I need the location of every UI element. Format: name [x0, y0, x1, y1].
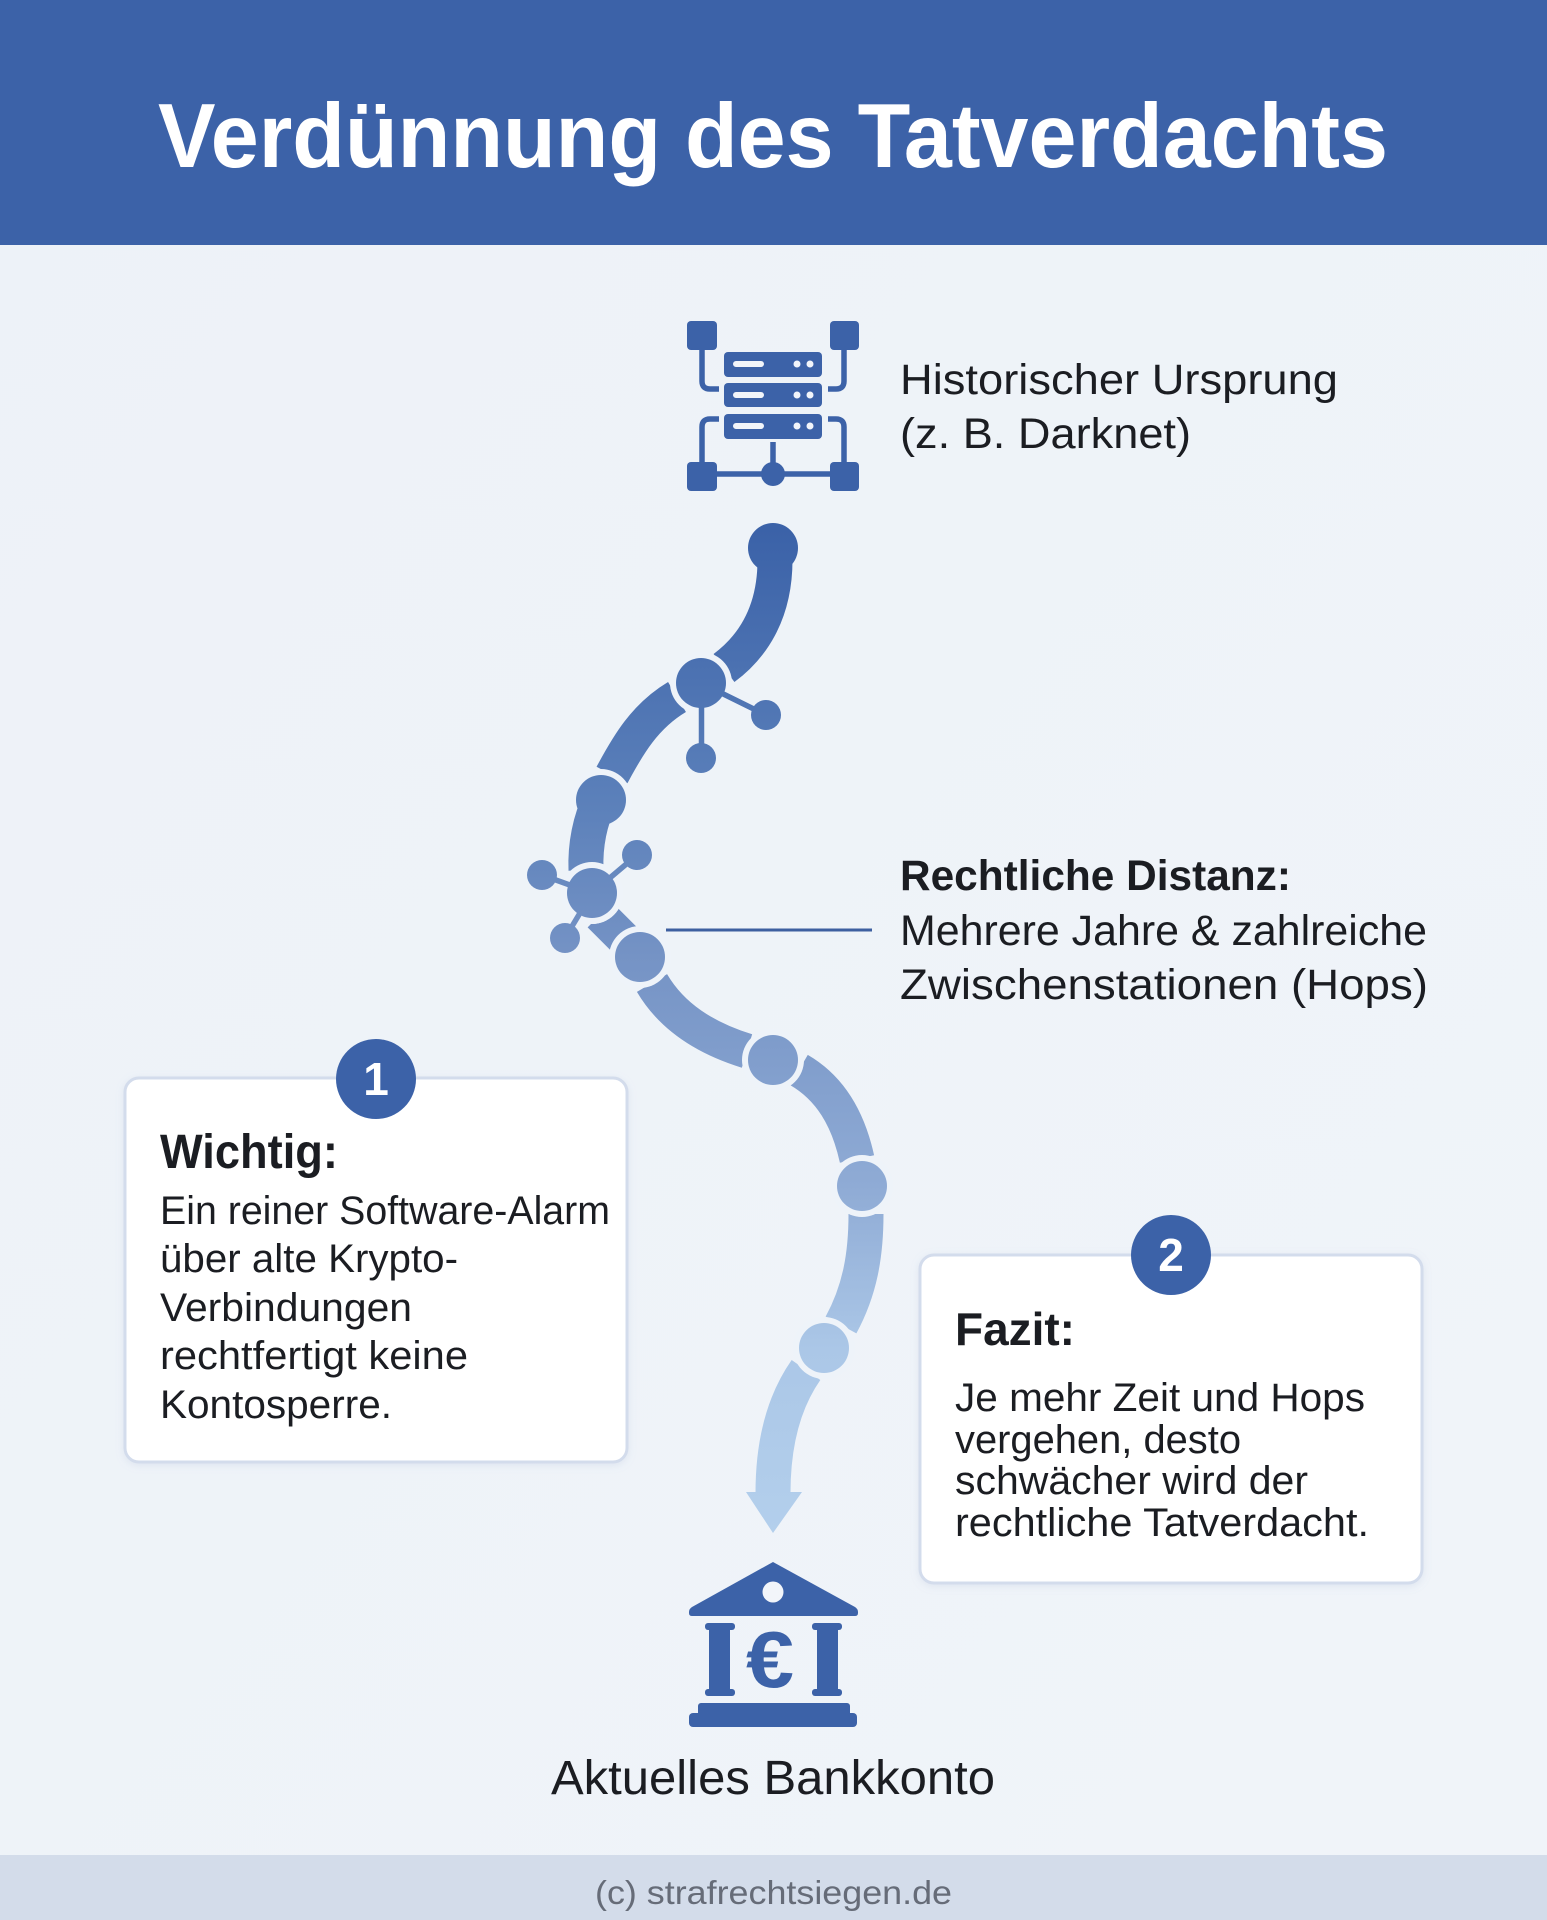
label: legal distance: Mehrere Jahre & zahlreiche: [900, 907, 1427, 955]
winding path with hop nodes: [527, 523, 893, 1533]
footer: (c) strafrechtsiegen.de: [595, 1874, 952, 1911]
label: historical origin: [900, 356, 1338, 458]
label: current bank account: Aktuelles Bankkonto: [551, 1752, 995, 1805]
body text: Fazit: schwächer wird der: [955, 1459, 1308, 1503]
icon: bank with euro: [689, 1562, 858, 1727]
label: legal distance: Zwischenstationen (Hops): [900, 961, 1428, 1009]
label: historical origin: Historischer Ursprung: [900, 356, 1338, 404]
body text: Wichtig: rechtfertigt keine: [160, 1334, 468, 1378]
label: legal distance: Rechtliche Distanz:: [900, 852, 1291, 900]
heading: Wichtig: Wichtig:: [160, 1126, 338, 1179]
icon: bank with euro: €: [746, 1615, 794, 1704]
body text: Wichtig: Verbindungen: [160, 1286, 412, 1330]
badge 2: [1131, 1215, 1211, 1295]
panel: Wichtig: [125, 1039, 627, 1462]
body text: Fazit: vergehen, desto: [955, 1418, 1241, 1462]
body text: Wichtig: Kontosperre.: [160, 1383, 392, 1427]
badge 1: 1: [363, 1053, 389, 1105]
badge 1: [336, 1039, 416, 1119]
heading: Fazit: Fazit:: [955, 1303, 1075, 1355]
body text: Fazit: [955, 1376, 1369, 1545]
icon: server network origin: [687, 321, 859, 491]
header banner: [0, 0, 1547, 245]
panel: Fazit: [920, 1215, 1422, 1583]
leader line: [666, 928, 872, 932]
label: legal distance: [900, 852, 1428, 1009]
body text: Fazit: Je mehr Zeit und Hops: [955, 1376, 1365, 1420]
badge 2: 2: [1158, 1229, 1184, 1281]
body text: Fazit: rechtliche Tatverdacht.: [955, 1501, 1369, 1545]
footer: [0, 1855, 1547, 1920]
body text: Wichtig: Ein reiner Software-Alarm: [160, 1189, 610, 1233]
body text: Wichtig: über alte Krypto-: [160, 1237, 458, 1281]
label: historical origin: (z. B. Darknet): [900, 410, 1191, 458]
title: Verdünnung des Tatverdachts: [158, 86, 1388, 187]
body text: Wichtig: [160, 1189, 610, 1427]
